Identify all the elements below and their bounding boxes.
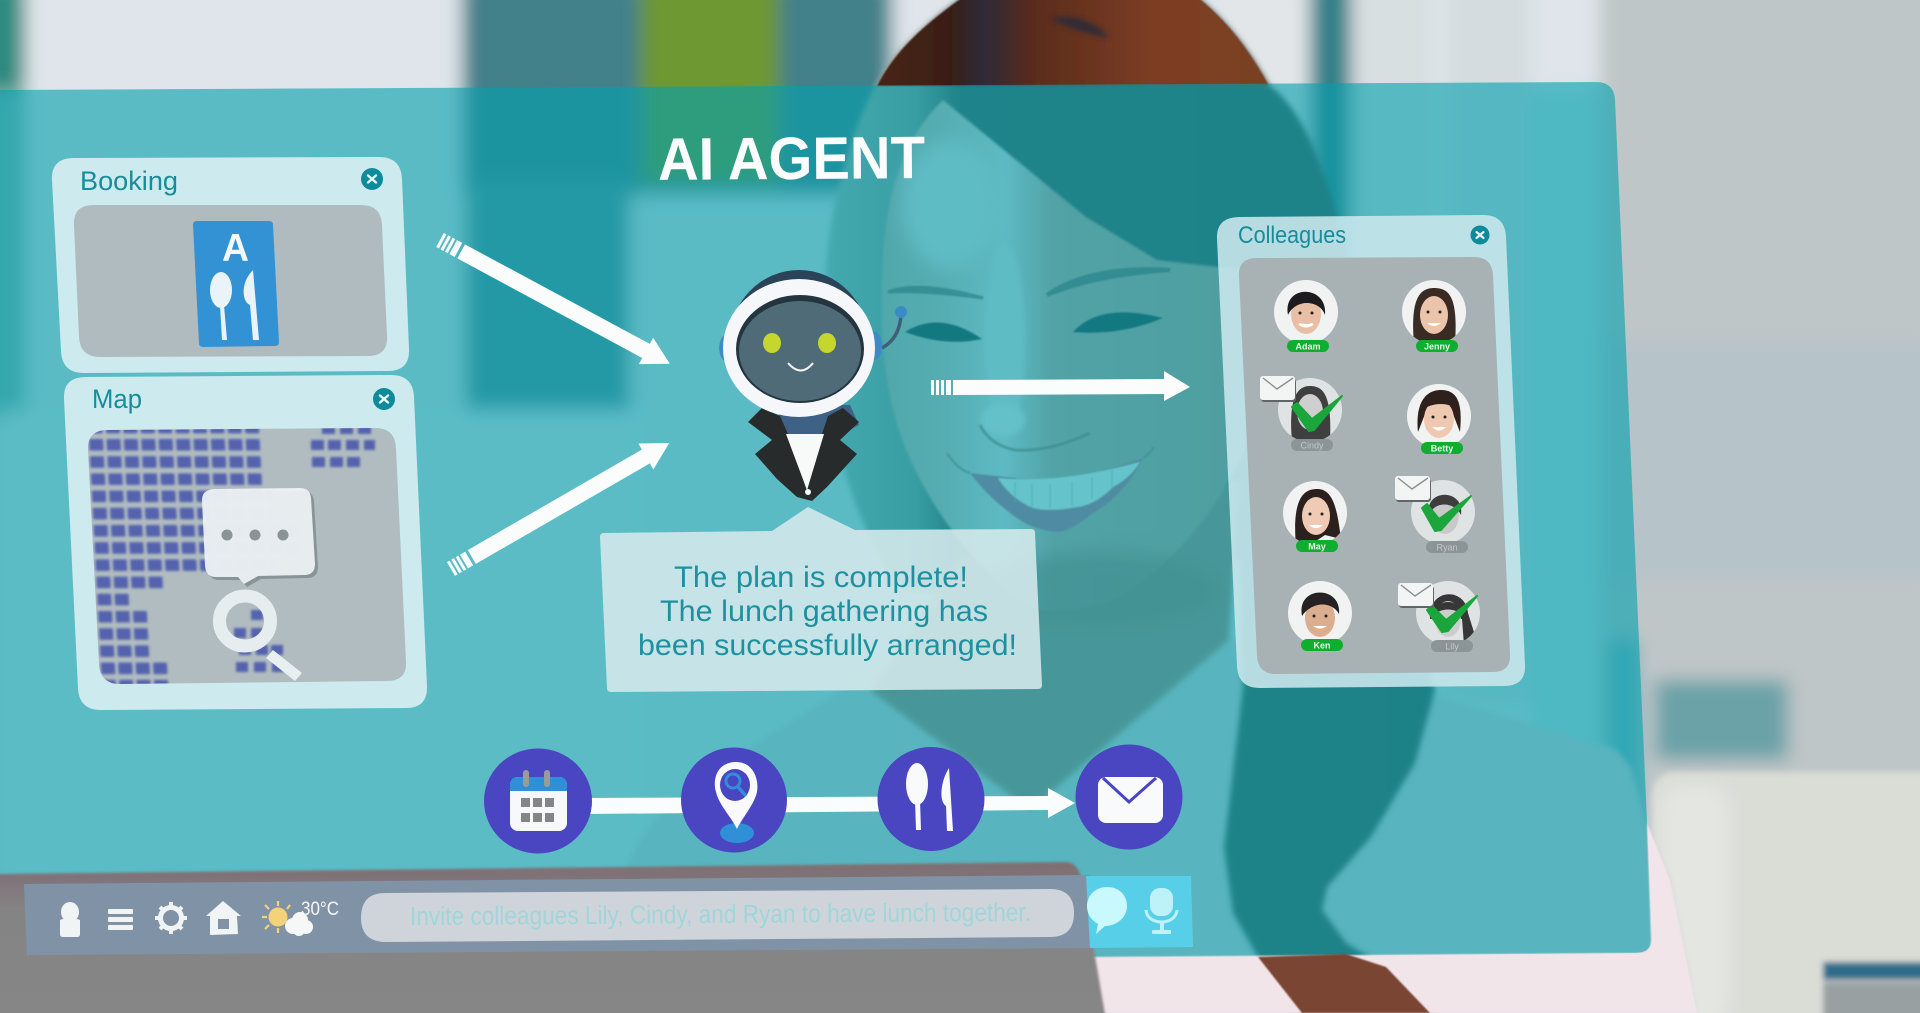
icon: envelope Cindy [1260,376,1296,402]
panel: booking [52,157,409,373]
avatar: Lily [1416,581,1480,652]
avatar: Cindy [1278,378,1342,451]
panel: map [64,375,427,710]
speech text: The plan is complete! [674,561,968,594]
chat bubble [202,488,318,587]
icon: microphone [1146,888,1177,934]
avatar: Cindy: Cindy [1300,440,1324,450]
restaurant card icon: A [222,227,249,270]
restaurant card icon [193,221,279,347]
background sofa [1652,772,1920,1013]
robot helmet [723,270,875,417]
speech text: been successfully arranged! [638,629,1017,662]
timeline arrow [585,788,1075,818]
avatar: Ken [1288,581,1352,653]
shirt below the panel [1085,823,1697,1013]
avatar: May [1283,481,1347,553]
input text: Invite colleagues Lily, Cindy, and Ryan to have lunch together. [410,897,1031,931]
map content area [88,428,406,684]
step icon: dining [878,747,984,851]
robot ears [719,331,882,363]
avatar: Adam: Adam [1295,342,1321,352]
step icon: location pin [681,748,787,852]
robot eyes [763,333,836,353]
translucent teal screen panel [0,82,1652,960]
robot antenna [882,306,907,348]
icon: menu [108,909,133,930]
visible hair above the panel [877,0,1269,86]
arrow: map to agent [444,430,677,582]
colleagues heading: Colleagues [1238,222,1346,249]
avatar: Ken: Ken [1313,640,1331,650]
arrow: booking to agent [433,227,677,377]
bottom toolbar [24,875,1193,955]
step icon: calendar [484,748,592,854]
avatar: Jenny [1402,280,1466,352]
avatar: Adam [1274,280,1338,352]
facial features [888,269,1170,532]
input box [361,889,1074,942]
icon: check Ryan [1422,496,1471,531]
magnifier [220,596,302,681]
speech text [638,561,1017,662]
robot suit [748,408,859,501]
avatar: May: May [1308,542,1326,552]
colleagues content area [1239,257,1510,674]
robot smile [788,363,813,370]
arrow: agent to colleagues [931,371,1190,401]
close button [373,388,395,410]
speech box [600,507,1042,692]
booking heading: Booking [80,166,178,196]
background photo: woman [600,0,1697,1013]
step icon: mail [1076,744,1182,850]
hair tail below the panel [1258,954,1430,1013]
icon: weather [262,901,313,936]
icon: home [206,901,241,935]
icon: check Cindy [1292,396,1342,431]
panel: colleagues [1217,215,1525,688]
voice section [1086,876,1193,948]
avatar: Lily: Lily [1445,642,1459,652]
map heading: Map [92,384,142,414]
close button [361,168,383,190]
icon: chat [1087,887,1127,934]
temperature: 30°C [301,899,339,920]
booking content area [74,205,387,357]
speech text: The lunch gathering has [660,595,988,628]
avatar: Ryan: Ryan [1436,542,1458,552]
laptop silhouette [0,862,1106,1013]
title: AI AGENT [658,124,925,193]
icon: user [60,902,80,937]
avatar: Jenny: Jenny [1424,342,1450,352]
icon: envelope Lily [1398,583,1434,608]
face lighting [902,140,1220,628]
icon: settings gear [155,902,187,934]
pixel map [88,428,376,684]
icon: envelope Ryan [1395,476,1431,502]
avatar: Betty: Betty [1431,444,1453,454]
close button [1470,226,1490,244]
robot mascot [719,270,907,501]
avatar: Betty [1407,384,1471,456]
avatar: Ryan [1411,480,1475,553]
icon: check Lily [1427,596,1477,632]
